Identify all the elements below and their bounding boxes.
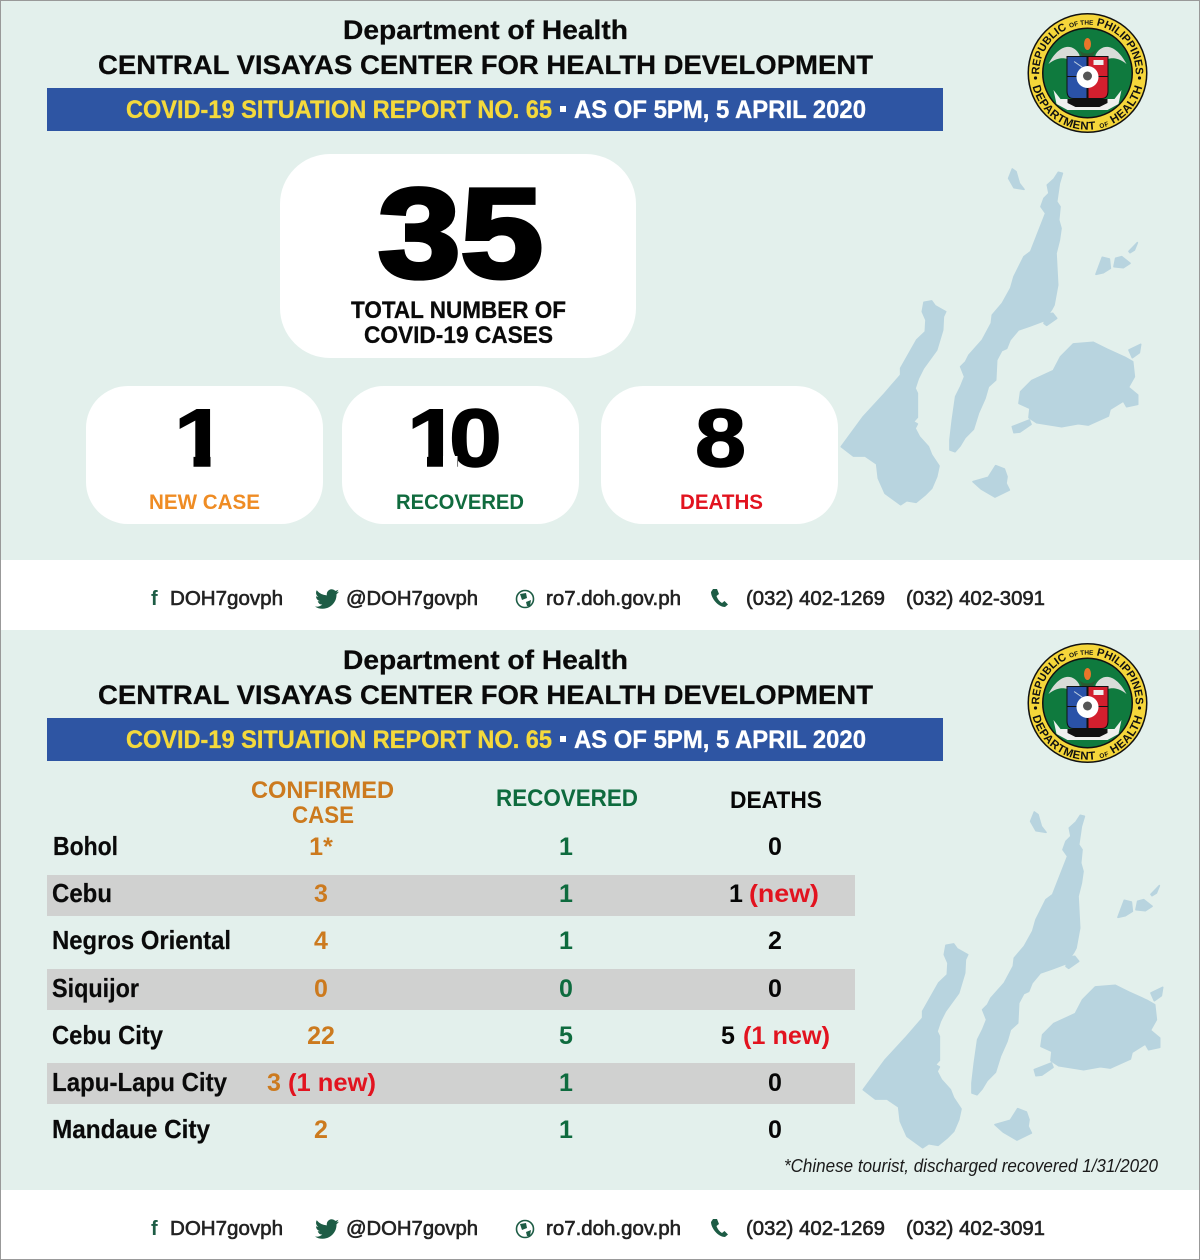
map of Central Visayas, top [841,169,1141,505]
panel: breakdown table [47,643,1163,1176]
table row: Lapu-Lapu City [47,1063,855,1104]
table row: Mandaue City: Mandaue City [52,1114,210,1144]
table row: Bohol: 1 [559,833,573,861]
report banner [47,88,943,131]
card: total cases: COVID-19 CASES [364,322,553,349]
footer: contacts, top: @DOH7govph [346,588,478,610]
footer: contacts, top: (032) 402-1269 [746,588,885,610]
footer: contacts, top: DOH7govph [170,588,283,610]
card: deaths [601,386,838,524]
report banner: COVID-19 SITUATION REPORT NO. 65 [126,96,552,124]
card: new case [86,386,323,524]
icon: globe [516,590,534,608]
table row: Bohol: 0 [768,833,782,861]
header: department title: Department of Health [343,15,628,45]
footer: contacts, bottom: (032) 402-3091 [906,1218,1045,1240]
header: department title [98,15,874,80]
table row: Negros Oriental: 2 [768,927,782,955]
card: deaths: DEATHS [680,491,763,514]
table row: Cebu City: (1 new) [743,1022,830,1050]
table row: Siquijor: 0 [314,975,328,1003]
table column headers: CONFIRMED [251,777,394,804]
table row: Negros Oriental: 1 [559,927,573,955]
footer: contacts, bottom: (032) 402-1269 [746,1218,885,1240]
icon: twitter [315,1219,339,1239]
table row: Cebu: (new) [749,880,819,908]
table row: Lapu-Lapu City: 1 [559,1069,573,1097]
table row: Cebu City: 22 [307,1022,335,1050]
table row: Mandaue City: 2 [314,1116,328,1144]
card: total cases: TOTAL NUMBER OF [351,297,566,324]
card: deaths: 8 [695,393,746,484]
table row: Mandaue City: 0 [768,1116,782,1144]
table row: Bohol: 1* [309,833,333,861]
card: recovered [342,386,579,524]
table row: Cebu: 1 [729,880,743,908]
icon: globe [516,1220,534,1238]
table row: Mandaue City [52,1114,782,1144]
footer: contacts, top: ro7.doh.gov.ph [546,588,681,610]
footer: contacts, bottom: @DOH7govph [346,1218,478,1240]
table row: Negros Oriental [52,925,782,955]
icon: twitter [315,589,339,609]
table row: Cebu City: 5 [721,1022,735,1050]
table row: Siquijor: 0 [768,975,782,1003]
footer: contacts, bottom: DOH7govph [170,1218,283,1240]
table row: Mandaue City: 1 [559,1116,573,1144]
table row: Lapu-Lapu City: Lapu-Lapu City [52,1067,227,1097]
table row: Bohol [53,831,782,861]
table column headers: RECOVERED [496,785,638,812]
table row: Lapu-Lapu City: 3 [267,1069,281,1097]
table row: Cebu: 3 [314,880,328,908]
table row: Siquijor: Siquijor [52,973,139,1003]
panel: summary [47,13,1148,524]
icon: DOH seal [1028,643,1148,763]
icon: phone [711,1219,728,1237]
table column headers: DEATHS [730,787,822,814]
report banner: AS OF 5PM, 5 APRIL 2020 [574,96,866,124]
footer: contacts, top: (032) 402-3091 [906,588,1045,610]
icon: phone [711,589,728,607]
table row: Cebu City: Cebu City [52,1020,163,1050]
icon: DOH seal [1028,13,1148,133]
report banner [47,718,943,761]
table column headers [251,777,822,829]
card: recovered: 10 [407,392,502,484]
table row: Cebu: Cebu [52,878,112,908]
table row: Cebu City: 5 [559,1022,573,1050]
footer: contacts, top [0,560,1200,630]
report banner: AS OF 5PM, 5 APRIL 2020 [574,726,866,754]
table row: Cebu: 1 [559,880,573,908]
card: new case: 1 [174,392,227,484]
table column headers: CASE [292,802,354,829]
table row: Lapu-Lapu City: 0 [768,1069,782,1097]
table row: Cebu City [52,1020,830,1050]
footer: contacts, bottom [0,1190,1200,1260]
report banner: COVID-19 SITUATION REPORT NO. 65 [126,726,552,754]
table row: Bohol: Bohol [53,831,118,861]
footnote: *Chinese tourist, discharged recovered 1/31/2020 [784,1156,1158,1176]
card: total cases [280,154,636,358]
card: new case: NEW CASE [149,491,260,514]
header: department title: CENTRAL VISAYAS CENTER FOR HEALTH DEVELOPMENT [98,680,874,710]
table row: Lapu-Lapu City: (1 new) [288,1069,376,1097]
header: department title: Department of Health [343,645,628,675]
icon: facebook: f [151,1218,158,1240]
map of Central Visayas, bottom [863,812,1163,1148]
card: recovered: RECOVERED [396,491,524,514]
card: total cases: 35 [378,162,543,304]
table row: Siquijor [47,969,855,1010]
table row: Negros Oriental: 4 [314,927,328,955]
table row: Negros Oriental: Negros Oriental [52,925,231,955]
table row: Cebu [47,875,855,916]
table row: Siquijor: 0 [559,975,573,1003]
icon: facebook: f [151,588,158,610]
header: department title [98,645,874,710]
footer: contacts, bottom: ro7.doh.gov.ph [546,1218,681,1240]
header: department title: CENTRAL VISAYAS CENTER FOR HEALTH DEVELOPMENT [98,50,874,80]
